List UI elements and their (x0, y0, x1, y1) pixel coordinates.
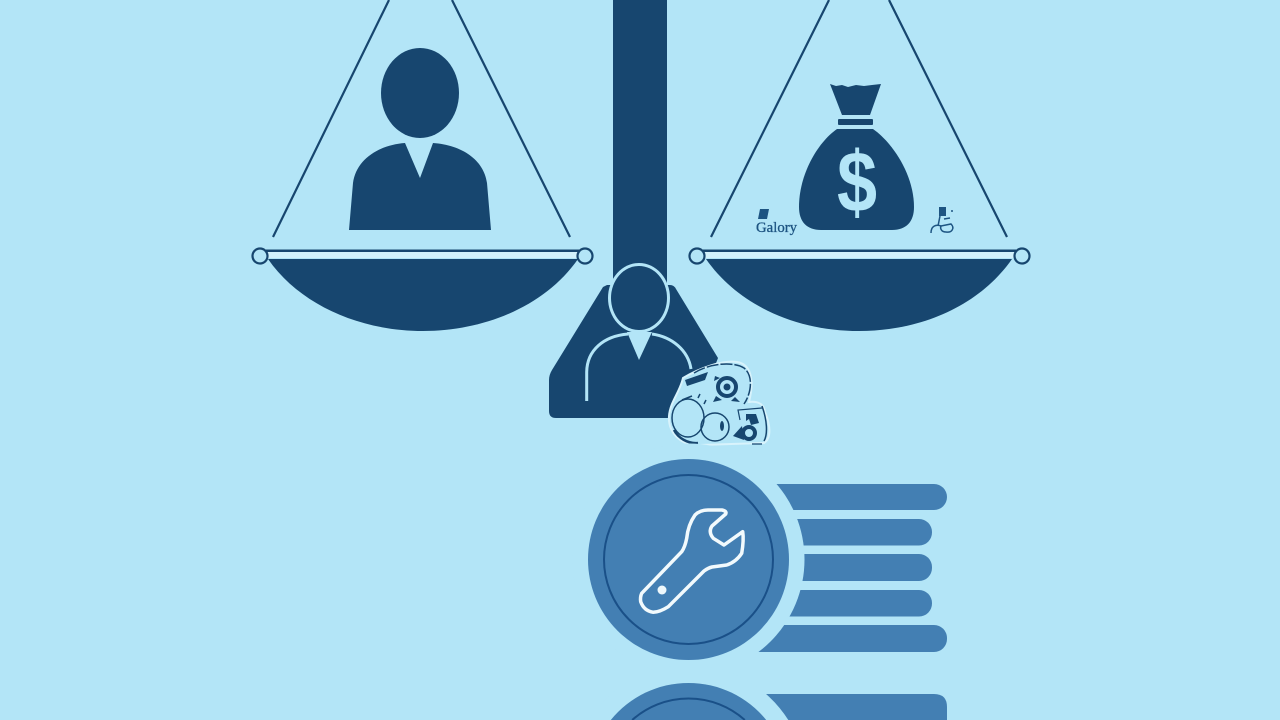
salary label: Galory (756, 220, 797, 236)
salary label (756, 209, 797, 236)
second badge halo (589, 665, 788, 720)
second badge (611, 683, 766, 720)
right pan strings (711, 0, 1007, 237)
left pan beam (252, 248, 592, 264)
list bars (740, 484, 947, 652)
scale pole (613, 0, 667, 285)
dollar sign: $ (837, 133, 877, 230)
icon: person (349, 48, 491, 230)
list row: wrench with bars (572, 444, 947, 676)
left pan strings (273, 0, 570, 237)
worker head ring (608, 263, 670, 333)
scale base with worker (549, 263, 718, 418)
second badge inner ring (632, 699, 745, 720)
second row bar (740, 694, 947, 720)
worker collar (627, 332, 652, 360)
badge halo (572, 444, 804, 676)
icon: worker body outline (587, 334, 691, 401)
list row: second, cropped at the page edge (589, 665, 947, 720)
right scale pan with money bag (690, 0, 1030, 331)
icon: money bag (799, 84, 914, 230)
icon: wrench (640, 510, 743, 612)
wrench badge (588, 459, 789, 660)
right pan bowl (706, 259, 1012, 331)
left scale pan with person (252, 0, 592, 331)
left pan bowl (268, 259, 578, 331)
base shape (549, 285, 718, 418)
icon: gears and cells cluster (669, 362, 769, 445)
badge inner ring (604, 475, 773, 644)
icon: worker head (611, 266, 667, 330)
small glyph mark (931, 207, 953, 233)
right pan beam (690, 248, 1030, 264)
